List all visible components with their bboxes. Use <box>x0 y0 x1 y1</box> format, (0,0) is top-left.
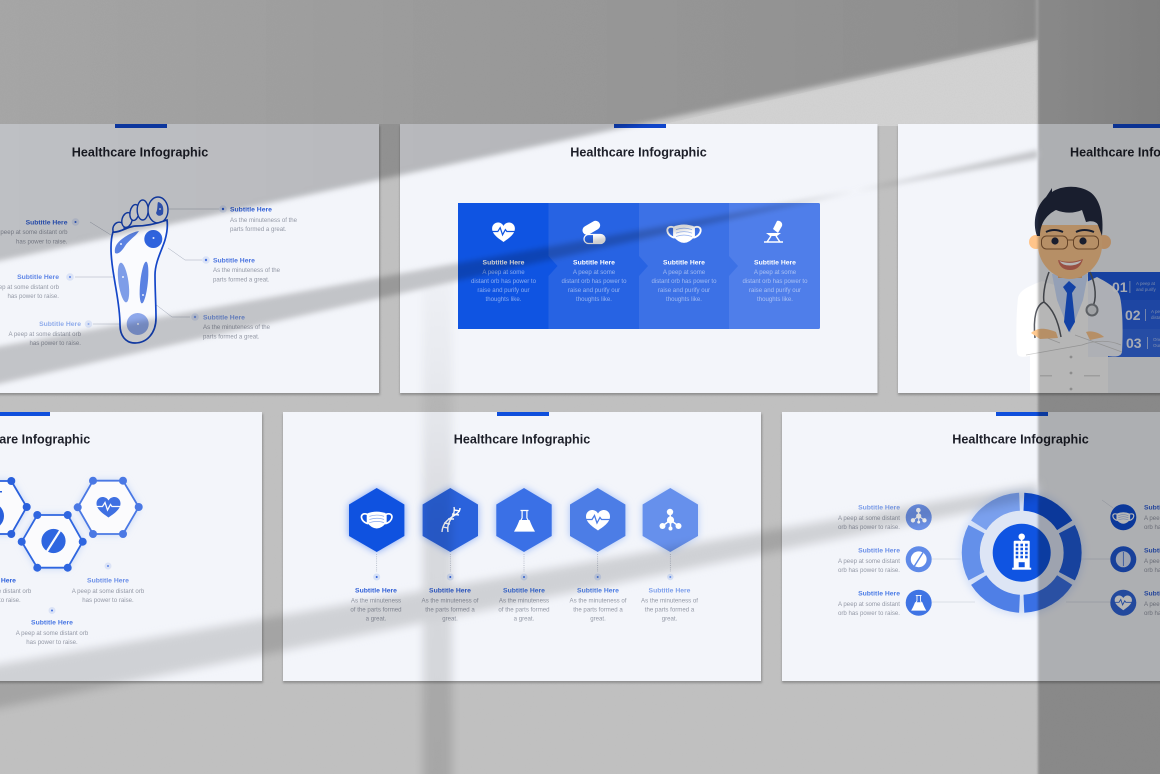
left item 2 <box>838 546 932 574</box>
column 3: A peep at some <box>663 269 706 276</box>
column 3: thoughts like. <box>666 296 702 303</box>
label: bottom <box>16 607 89 646</box>
label: right: Subtitle Here <box>87 577 129 584</box>
icon: hospital <box>1012 534 1031 570</box>
hexagon column 4: heart: the parts formed a <box>573 606 623 614</box>
slide: doctor with numbered list <box>898 124 1160 395</box>
hands <box>1031 329 1104 340</box>
hexagon column 5: molecule: Subtitle Here <box>649 587 691 594</box>
left labels: Subtitle Here <box>17 274 59 281</box>
hexagon column 2: DNA: Subtitle Here <box>429 587 471 594</box>
hexagon column 1: mask: As the minuteness <box>351 598 401 604</box>
left item 3 <box>838 590 932 617</box>
left labels <box>0 218 92 347</box>
column 4: A peep at some <box>754 269 797 276</box>
column 4: Subtitle Here <box>754 260 796 266</box>
left item 1: Subtitle Here <box>858 505 900 512</box>
hexagon column 2: DNA: great. <box>442 616 458 622</box>
title: Healthcare Infographic <box>454 432 590 446</box>
left labels: has power to raise. <box>8 293 59 300</box>
left item 3: A peep at some distant <box>838 601 900 608</box>
left labels: Subtitle Here <box>39 321 81 328</box>
column 3: distant orb has power to <box>651 278 717 285</box>
title: Healthcare Infographic <box>570 146 707 160</box>
right labels: As the minuteness of the <box>203 324 271 331</box>
left item 1: A peep at some distant <box>838 515 900 522</box>
hexagon column 3: flask: As the minuteness <box>499 598 549 604</box>
illustration: doctor <box>1016 187 1123 393</box>
right labels: parts formed a great. <box>230 226 287 233</box>
hexagon column 5: molecule: the parts formed a <box>645 606 695 614</box>
hexagon column 3: flask: of the parts formed <box>498 606 550 614</box>
slide: hospital ring diagram <box>782 412 1160 683</box>
panel: numbered list: A peep at <box>1136 281 1156 286</box>
panel: column blocks <box>458 203 820 329</box>
column 1: thoughts like. <box>486 296 522 303</box>
column 3: raise and purify our <box>658 287 710 294</box>
panel: numbered list: 01 <box>1112 279 1128 295</box>
left item 2: A peep at some distant <box>838 558 900 565</box>
ring chart <box>960 491 1084 615</box>
hexagon column 4: heart <box>570 488 627 622</box>
right labels: Subtitle Here <box>213 257 255 264</box>
right labels: Subtitle Here <box>203 314 245 321</box>
hexagon column 1: mask: Subtitle Here <box>355 587 397 594</box>
hexagon: left <box>0 477 31 538</box>
column 2: distant orb has power to <box>561 278 627 285</box>
column 1: raise and purify our <box>477 287 530 294</box>
column 3: Subtitle Here <box>663 260 705 266</box>
label: left <box>0 562 32 604</box>
hexagon column 1: mask <box>349 488 404 622</box>
title: Healthcare Infographic <box>72 146 208 160</box>
hexagon column 4: heart: Subtitle Here <box>577 587 619 594</box>
left item 1 <box>838 504 932 531</box>
column 2 <box>561 219 627 303</box>
column 2: Subtitle Here <box>573 260 615 266</box>
coat <box>1016 277 1123 393</box>
right item 1 <box>1110 504 1160 531</box>
right labels: Subtitle Here <box>230 207 272 214</box>
right item 3 <box>1110 590 1160 617</box>
label: right <box>72 562 145 604</box>
hexagon glow <box>0 481 139 568</box>
hexagon: heart <box>74 477 143 538</box>
hexagon column 1: mask: a great. <box>366 616 387 622</box>
panel: numbered list: and purify <box>1136 287 1157 292</box>
left item 1: orb has power to raise. <box>838 524 900 531</box>
left item 2: Subtitle Here <box>858 548 900 555</box>
stethoscope <box>1034 272 1098 338</box>
hexagon column 4: heart: great. <box>590 616 606 622</box>
column 4: raise and purify our <box>749 287 801 294</box>
column 4: thoughts like. <box>757 296 793 303</box>
right labels: As the minuteness of the <box>230 217 298 224</box>
label: bottom: A peep at some distant orb <box>16 630 89 637</box>
hexagon: pill <box>18 511 87 572</box>
left labels: A peep at some distant orb <box>8 331 82 338</box>
connector lines <box>932 500 1113 602</box>
right item 2 <box>1110 546 1160 574</box>
slide: hexagon network <box>0 412 263 683</box>
hexagon column 5: molecule: great. <box>662 616 678 622</box>
shirt and tie <box>1052 274 1088 333</box>
left labels: has power to raise. <box>30 340 81 347</box>
label: right: has power to raise. <box>82 597 134 604</box>
right labels: As the minuteness of the <box>213 267 281 274</box>
left item 3: Subtitle Here <box>858 590 900 597</box>
column 3 <box>651 224 717 303</box>
hexagon column 1: mask: of the parts formed <box>350 606 402 614</box>
column 4: distant orb has power to <box>742 278 808 285</box>
column 1 <box>471 222 537 303</box>
column 2: raise and purify our <box>568 287 620 294</box>
left labels: has power to raise. <box>16 238 68 246</box>
hexagon column 2: DNA: As the minuteness of <box>422 598 479 604</box>
panel: numbered list: 02 <box>1125 307 1141 323</box>
connector lines <box>75 209 219 324</box>
hexagon column 2: DNA: the parts formed a <box>425 606 475 614</box>
panel: numbered list <box>1088 272 1160 357</box>
right labels: parts formed a great. <box>213 276 270 284</box>
column 1: A peep at some <box>482 269 525 276</box>
column 4 <box>742 221 808 303</box>
column 2: thoughts like. <box>576 296 612 303</box>
title: Healthcare Infographic <box>952 432 1089 446</box>
hexagon column 3: flask: Subtitle Here <box>503 587 545 594</box>
label: right: A peep at some distant orb <box>72 588 145 595</box>
head <box>1029 187 1111 279</box>
column 1: Subtitle Here <box>483 260 525 266</box>
left item 3: orb has power to raise. <box>838 610 900 617</box>
hexagon column 2: DNA <box>422 488 479 622</box>
right labels: parts formed a great. <box>203 334 260 340</box>
hexagon column 4: heart: As the minuteness of <box>570 598 627 604</box>
hexagon column 3: flask: a great. <box>514 616 535 622</box>
label: bottom: has power to raise. <box>26 639 78 646</box>
column 1: distant orb has power to <box>471 278 537 285</box>
right labels <box>191 205 298 340</box>
slide: four blue columns <box>400 124 878 395</box>
left labels: Subtitle Here <box>26 219 68 226</box>
hexagon column 3: flask <box>496 488 552 622</box>
left item 2: orb has power to raise. <box>838 567 900 574</box>
hexagon column 5: molecule <box>641 488 698 622</box>
panel: numbered list: 03 <box>1126 335 1142 351</box>
slide: five hexagons <box>283 412 762 683</box>
icon: foot <box>111 197 168 343</box>
label: bottom: Subtitle Here <box>31 619 73 626</box>
hexagon column 5: molecule: As the minuteness of <box>641 598 698 604</box>
slide: foot reflexology <box>0 124 380 395</box>
column 2: A peep at some <box>573 269 616 276</box>
